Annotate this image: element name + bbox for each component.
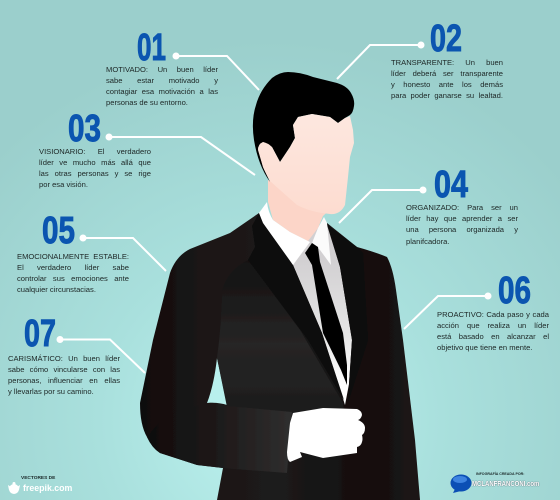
text: motivado: MOTIVADO: Un buen líder (106, 64, 218, 74)
text: proactivo (437, 310, 549, 352)
text: visionario: por esa visión. (39, 180, 88, 189)
text: visionario: VISIONARIO: El verdadero (39, 146, 151, 156)
right lapel (327, 223, 368, 403)
text: proactivo: PROACTIVO: Cada paso y cada (437, 310, 549, 318)
armpit gap (207, 358, 227, 405)
connector 04 (339, 186, 426, 223)
right collar (312, 217, 331, 265)
text: organizado: una persona organizada y (406, 225, 518, 234)
jacket front panel (217, 260, 345, 420)
left collar (259, 202, 310, 265)
businessman figure (140, 72, 420, 500)
credit: mclanfranconi: INFOGRAFÍA CREADA POR: (476, 472, 524, 476)
text: transparente (391, 58, 503, 100)
number 02: 02 (430, 18, 462, 60)
connector 07 (56, 336, 145, 373)
text: organizado (406, 203, 518, 246)
text: visionario: las otras personas y se rige (39, 169, 151, 178)
text: emocionalmente estable (17, 252, 129, 294)
number 06: 06 (498, 270, 531, 312)
text: proactivo: está basado en alcanzar el (437, 332, 549, 341)
text: motivado (106, 64, 218, 107)
credit: mclanfranconi (472, 472, 540, 488)
text: proactivo: objetivo que tiene en mente. (437, 343, 532, 352)
text: emocionalmente estable: cualquier circunstacias. (17, 285, 96, 294)
neck (268, 180, 335, 241)
number 05: 05 (42, 210, 75, 252)
text: emocionalmente estable: EMOCIONALMENTE ESTABLE: (17, 252, 129, 260)
number 03: 03 (68, 108, 101, 150)
text: motivado: sabe estar motivado y (106, 76, 218, 85)
suit jacket (140, 213, 420, 500)
connector 01 (172, 52, 259, 90)
text: organizado: planifcadora. (406, 237, 449, 246)
tie (305, 243, 347, 385)
text: carismático: y llevarlas por su camino. (8, 387, 94, 396)
text: transparente: para poder ganarse su lealtad. (391, 91, 503, 100)
number 01: 01 (137, 27, 166, 69)
text: transparente: y honesto ante los demás (391, 80, 503, 89)
text: organizado: líder hay que aprender a ser (406, 214, 518, 223)
text: emocionalmente estable: El verdadero líder sabe (17, 263, 129, 272)
forearm (147, 403, 292, 473)
icon: speech bubble (450, 474, 472, 493)
number 07: 07 (24, 313, 56, 355)
text: proactivo: acción que realiza un líder (437, 321, 549, 330)
text: motivado: contagiar esa motivación a las (106, 87, 218, 96)
hair (253, 72, 354, 182)
text: motivado: personas de su entorno. (106, 98, 188, 107)
connector 06 (404, 292, 492, 329)
text: transparente: líder deberá ser transparente (391, 69, 503, 78)
text: emocionalmente estable: controlar sus emociones ante (17, 274, 129, 283)
number 04: 04 (434, 164, 468, 206)
text: carismático: CARISMÁTICO: Un buen líder (8, 354, 120, 362)
text: visionario: líder ve mucho más allá que (39, 158, 151, 167)
credit: freepik: freepik.com (23, 483, 72, 493)
shirt (270, 225, 352, 405)
left lapel (248, 213, 345, 403)
text: carismático: sabe cómo vincularse con las (8, 365, 120, 374)
text: carismático (8, 354, 120, 396)
text: visionario (39, 146, 151, 189)
connector 05 (80, 234, 166, 271)
face (258, 114, 354, 214)
text: transparente: TRANSPARENTE: Un buen (391, 58, 503, 66)
hand (287, 408, 365, 462)
text: carismático: personas, influenciar en ellas (8, 376, 120, 385)
credit: freepik: VECTORES DE (21, 476, 55, 481)
connector 02 (337, 42, 424, 79)
credit: mclanfranconi: MCLANFRANCONI.com (472, 479, 539, 488)
credit: freepik (21, 476, 72, 493)
icon: freepik (8, 482, 20, 494)
connector 03 (106, 134, 255, 175)
text: organizado: ORGANIZADO: Para ser un (406, 203, 518, 212)
